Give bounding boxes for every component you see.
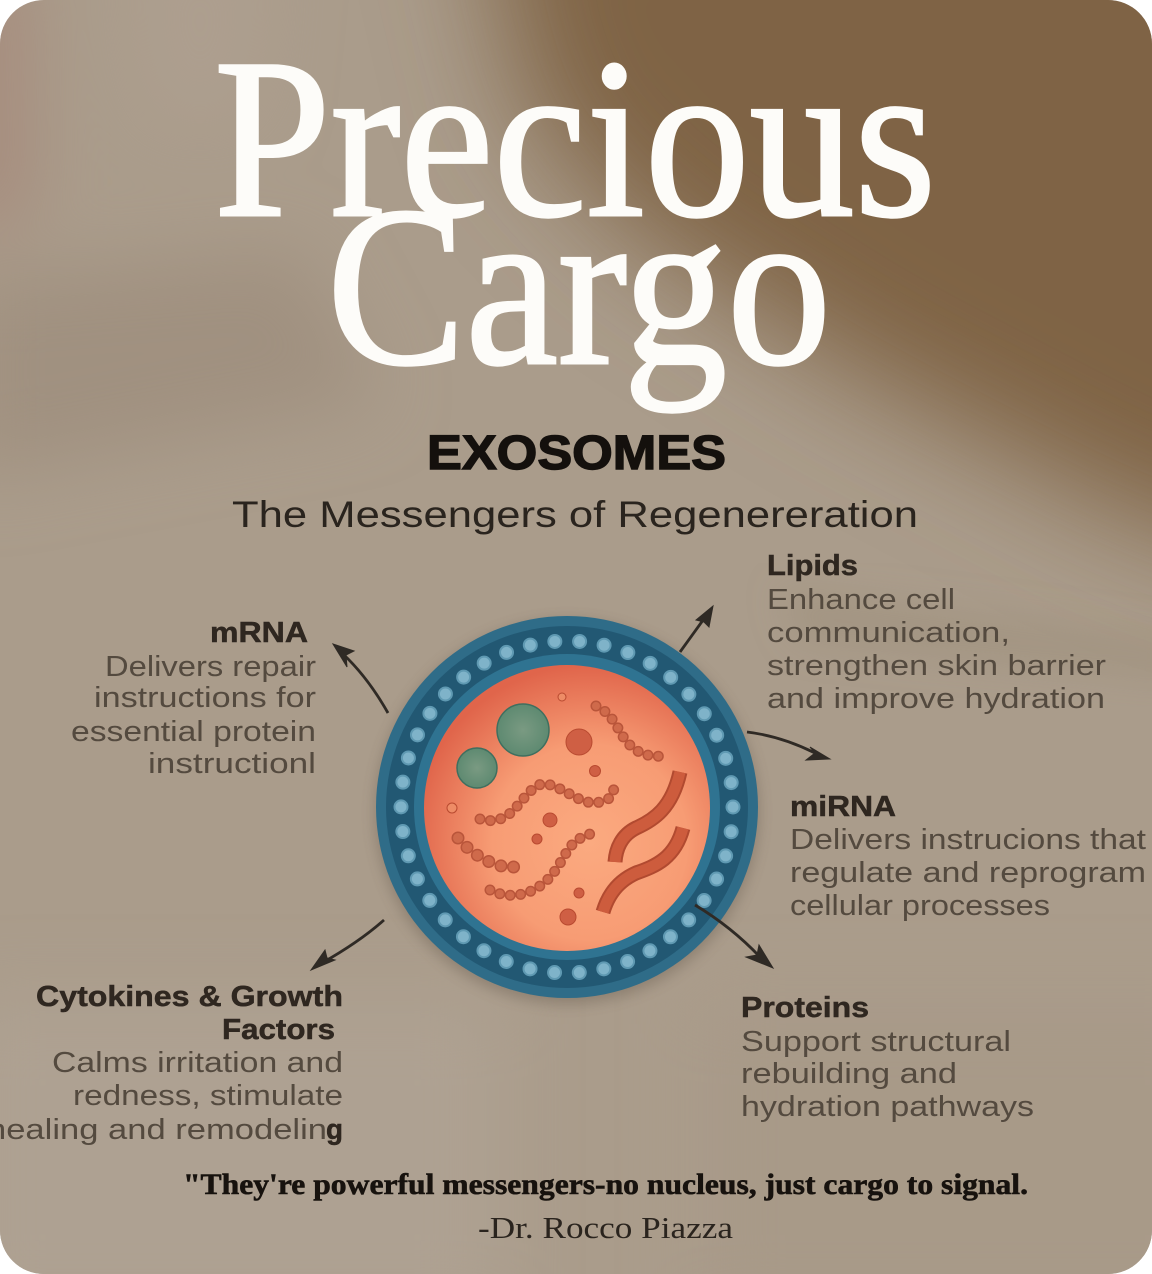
arrow: to lipids: [680, 606, 713, 652]
title: Cargo: [327, 161, 831, 413]
text block: miRNA: [790, 791, 1146, 922]
panel: cell core: [424, 665, 710, 951]
text block: miRNA: Delivers instrucions that: [790, 824, 1146, 856]
attribution: -Dr. Rocco Piazza: [478, 1210, 733, 1245]
icon: red particles: [447, 693, 600, 925]
text block: mRNA: essential protein: [71, 716, 316, 748]
diagram: exosome: [375, 616, 759, 1004]
text block: lipids: strengthen skin barrier: [767, 650, 1106, 682]
arrow: to mRNA: [333, 644, 388, 713]
text block: proteins: Support structural: [741, 1026, 1011, 1058]
text block: miRNA: cellular processes: [790, 890, 1050, 922]
text block: mRNA: [71, 617, 316, 780]
quote: "They're powerful messengers-no nucleus, just cargo to signal.: [183, 1168, 1028, 1201]
text block: mRNA: Delivers repair: [105, 651, 316, 683]
text block: cytokines and growth factors: Calms irritation and: [52, 1047, 343, 1079]
icon: membrane beads: [401, 641, 733, 973]
subtitle: The Messengers of Regenereration: [232, 494, 918, 535]
title: [214, 13, 936, 413]
text block: proteins: rebuilding and: [741, 1058, 957, 1090]
icon: rods: [603, 772, 683, 912]
text block: lipids: communication,: [767, 617, 1010, 649]
text block: cytokines and growth factors: Factors: [222, 1014, 335, 1046]
text block: proteins: hydration pathways: [741, 1091, 1034, 1123]
text block: lipids: Lipids: [767, 550, 858, 582]
text block: lipids: Enhance cell: [767, 584, 955, 616]
text block: cytokines and growth factors: redness, stimulate: [73, 1080, 343, 1112]
icon: green vesicles: [457, 704, 549, 788]
text block: mRNA: mRNA: [210, 617, 308, 649]
text block: cytokines and growth factors: g: [326, 1114, 343, 1146]
text block: proteins: [741, 992, 1034, 1123]
text block: lipids: [767, 550, 1106, 715]
text block: mRNA: instructionl: [148, 748, 316, 780]
text block: miRNA: regulate and reprogram: [790, 857, 1146, 889]
arrow: to cytokines: [311, 920, 384, 970]
text block: miRNA: miRNA: [790, 791, 896, 823]
text block: proteins: Proteins: [741, 992, 869, 1024]
icon: bead chains: [458, 706, 662, 895]
text block: cytokines and growth factors: Cytokines & Growth: [36, 981, 343, 1013]
heading: exosomes: EXOSOMES: [427, 427, 726, 480]
text block: mRNA: instructions for: [94, 682, 316, 714]
text block: lipids: and improve hydration: [767, 683, 1105, 715]
text block: cytokines and growth factors: [0, 981, 343, 1146]
title: Precious: [214, 13, 936, 265]
arrow: to miRNA: [747, 732, 830, 760]
arrow: to proteins: [695, 905, 773, 968]
